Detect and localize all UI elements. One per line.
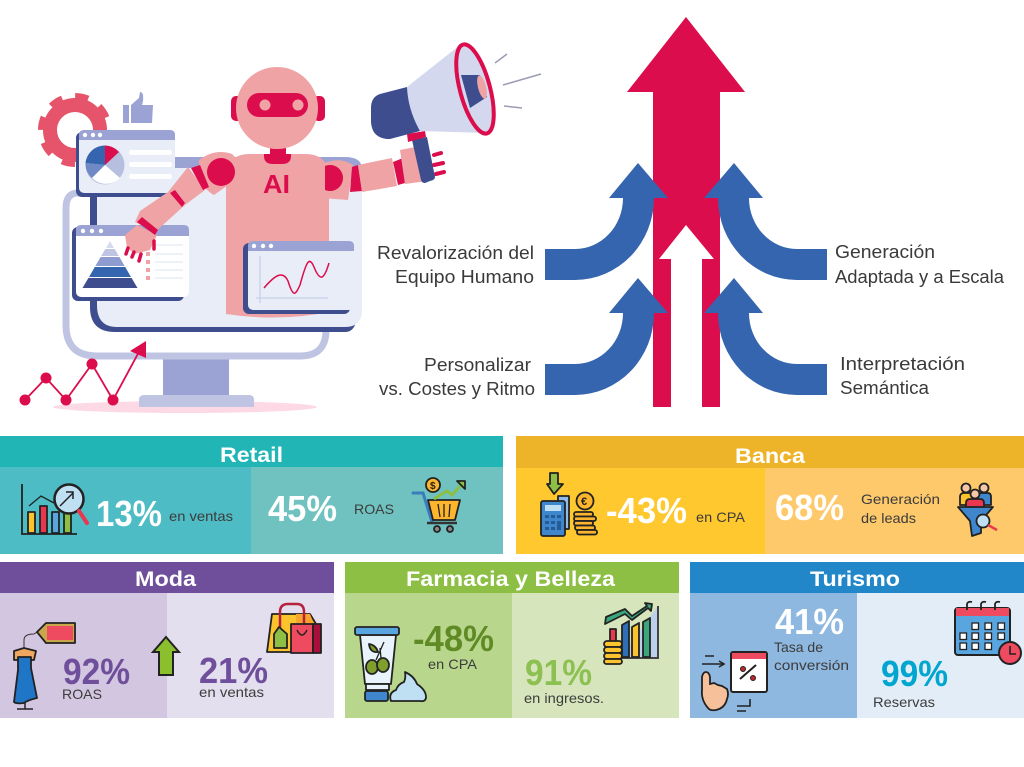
label: Interpretación Semántica: Interpretación [840, 354, 965, 374]
heading: Retail: Retail [220, 444, 283, 467]
panel: Moda [0, 562, 334, 718]
heading: Turismo: Turismo [810, 568, 900, 591]
stat: 68% Generación de leads: Generación [861, 491, 940, 507]
robot AI label: AI [263, 169, 290, 199]
blue arrow lower left [545, 278, 668, 395]
stat: 13% en ventas [96, 493, 233, 534]
icon: growth chart with coins [604, 603, 658, 664]
stat: -48% en CPA: -48% [413, 618, 494, 659]
icon: cream tube with olives [355, 627, 426, 701]
heading: Banca: Banca [735, 445, 805, 468]
window: pie chart [76, 130, 175, 230]
inner white arrow [659, 225, 714, 407]
stat: 99% Reservas [873, 653, 948, 710]
label: Generación Adaptada y a Escala [835, 242, 1005, 287]
trend line chart [20, 341, 146, 406]
stat: 91% en ingresos: en ingresos. [524, 690, 604, 706]
stat: 21% en ventas: 21% [199, 650, 268, 691]
panel: Farmacia y Belleza [345, 562, 679, 718]
stat: 92% ROAS: ROAS [62, 686, 102, 702]
icon: hand tapping percent window [702, 652, 767, 711]
icon: up arrow [153, 637, 179, 675]
icon: calculator and coins [541, 473, 597, 536]
stat: 68% Generación de leads: de leads [861, 510, 916, 526]
robot body [226, 67, 329, 318]
label: Interpretación Semántica: Semántica [840, 378, 930, 398]
label: Personalizar vs. Costes y Ritmo [379, 355, 535, 399]
stat: 45% ROAS: ROAS [354, 501, 394, 517]
stat: -43% en CPA: en CPA [696, 509, 746, 525]
stat: -48% en CPA: en CPA [428, 656, 478, 672]
label: Generación Adaptada y a Escala: Adaptada y a Escala [835, 267, 1005, 287]
icon: shopping bags [267, 604, 321, 653]
panel: Retail [0, 436, 503, 554]
label: Revalorización del Equipo Humano: Equipo Humano [395, 267, 534, 287]
stat: 68% Generación de leads: 68% [775, 487, 844, 528]
stat: 91% en ingresos [524, 652, 604, 706]
heading: Farmacia y Belleza: Farmacia y Belleza [406, 568, 615, 591]
icon: megaphone [371, 41, 541, 183]
icon: shopping cart [413, 478, 465, 532]
stat: 45% ROAS [268, 488, 394, 529]
label: Personalizar vs. Costes y Ritmo: Personalizar [424, 355, 531, 375]
icon: calculator and coins: € [581, 496, 587, 508]
label: Revalorización del Equipo Humano: Revalorización del [377, 243, 534, 263]
stat: 41% Tasa de conversión: 41% [775, 601, 844, 642]
icon: thumbs up [123, 92, 153, 123]
icon: dress with price tag [14, 623, 75, 709]
stat: 21% en ventas: en ventas [199, 684, 264, 700]
icon: bar chart with magnifier [22, 484, 87, 534]
label: Personalizar vs. Costes y Ritmo: vs. Costes y Ritmo [379, 379, 535, 399]
window: pyramid [72, 225, 189, 301]
stat: 68% Generación de leads [775, 487, 940, 528]
blue arrow upper left [545, 163, 668, 280]
stat: 41% Tasa de conversión [774, 601, 849, 673]
robot left arm [125, 152, 238, 261]
stat: 91% en ingresos: 91% [525, 652, 592, 693]
stat: 13% en ventas: en ventas [169, 508, 233, 524]
icon: gear [42, 97, 108, 163]
panel: Banca [516, 436, 1024, 554]
stat: 92% ROAS: 92% [63, 651, 130, 692]
icon: people funnel [958, 484, 997, 536]
stat: 99% Reservas: 99% [881, 653, 948, 694]
stat: -43% en CPA [606, 490, 746, 531]
stat: 41% Tasa de conversión: conversión [774, 657, 849, 673]
illustration: robot with monitor and megaphone [20, 41, 541, 413]
label: Revalorización del Equipo Humano [377, 243, 534, 287]
icon: calendar with clock [955, 602, 1021, 664]
stat: 41% Tasa de conversión: Tasa de [774, 639, 823, 655]
icon: shopping cart: $ [430, 481, 436, 492]
heading: Moda: Moda [135, 568, 196, 591]
label: Interpretación Semántica [840, 354, 965, 398]
label: Generación Adaptada y a Escala: Generación [835, 242, 935, 262]
window: line chart [243, 241, 354, 314]
monitor [53, 157, 362, 413]
blue arrow lower right [704, 278, 827, 395]
main red arrow [627, 17, 745, 407]
diagram: converging arrows [545, 17, 827, 407]
robot right arm [322, 147, 444, 200]
blue arrow upper right [704, 163, 827, 280]
stat: 13% en ventas: 13% [96, 493, 162, 534]
stat: 99% Reservas: Reservas [873, 694, 935, 710]
panel: Turismo [690, 562, 1024, 718]
stat: 45% ROAS: 45% [268, 488, 337, 529]
stat: -43% en CPA: -43% [606, 490, 687, 531]
